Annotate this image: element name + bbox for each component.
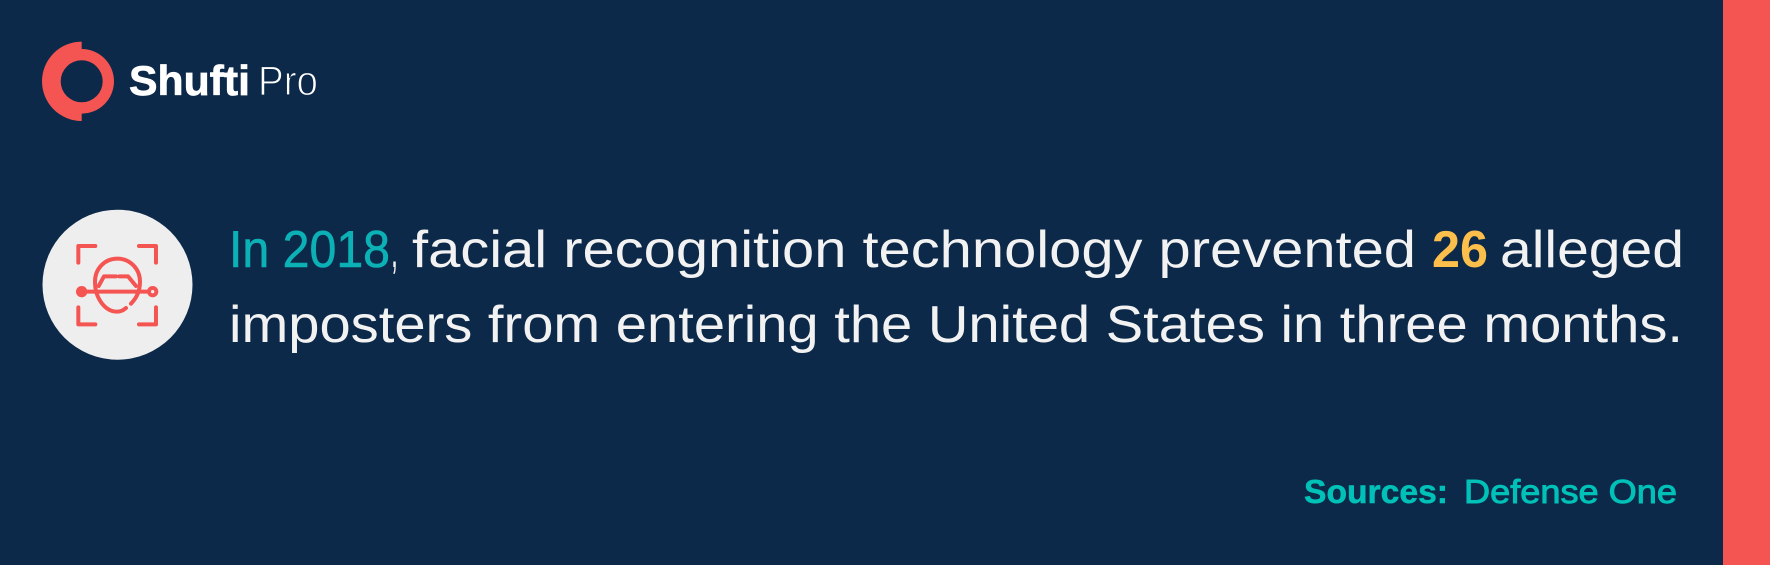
main statement	[229, 221, 1684, 354]
source credit	[1304, 473, 1677, 510]
icon: face scan glyph	[78, 246, 156, 324]
logo wordmark	[129, 57, 318, 104]
line 1	[229, 221, 1684, 279]
logo wordmark: Shufti	[129, 57, 250, 104]
logo mark	[42, 42, 114, 121]
line 1: facial recognition technology prevented	[412, 221, 1416, 279]
logo: Shufti Pro	[42, 42, 318, 121]
line 1: alleged	[1500, 221, 1684, 279]
icon background circle	[42, 210, 192, 360]
icon: facial recognition	[42, 210, 192, 360]
line 1: In 2018	[229, 221, 390, 279]
line 1: 26	[1432, 221, 1488, 279]
source credit: Defense One	[1464, 473, 1677, 510]
line 2: imposters from entering the United States in three months.	[229, 296, 1683, 354]
accent bar	[1723, 0, 1770, 565]
logo wordmark: Pro	[258, 57, 318, 104]
source credit: Sources:	[1304, 473, 1448, 510]
line 1: ,	[391, 221, 398, 279]
